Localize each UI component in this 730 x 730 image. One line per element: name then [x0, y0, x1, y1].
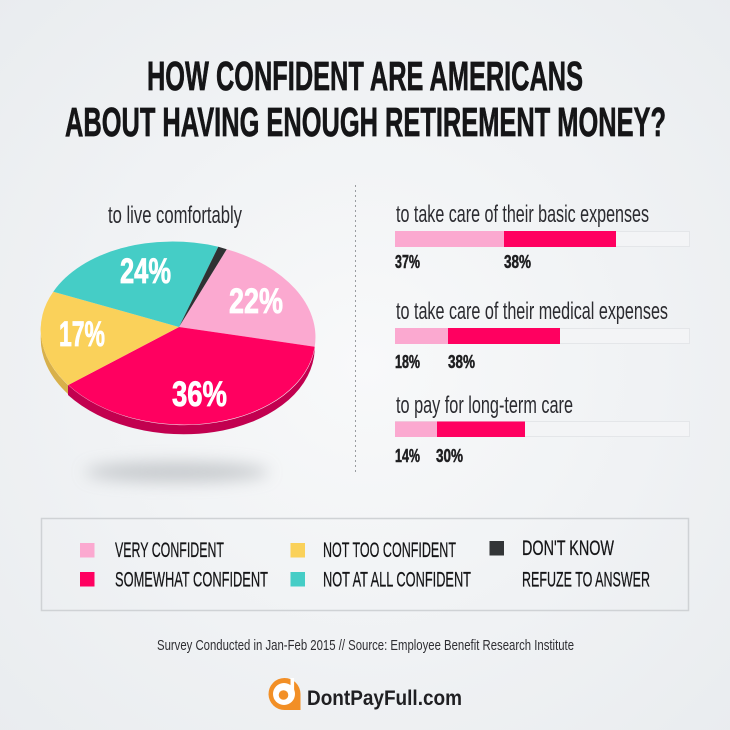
legend frame [42, 518, 688, 610]
pie label 36%: 36% [172, 375, 227, 414]
value 38%: 38% [448, 352, 475, 372]
swatch: not too confident [290, 543, 305, 558]
legend label: somewhat confident: SOMEWHAT CONFIDENT [115, 568, 268, 592]
pie side: not too confident [41, 325, 68, 394]
swatch: very confident [80, 543, 94, 558]
slice: somewhat confident 36% [68, 327, 315, 425]
pie label 22%: 22% [229, 282, 283, 321]
slice: very confident 22% [179, 249, 315, 347]
source note: Survey Conducted in Jan-Feb 2015 // Source: Employee Benefit Research Institute [157, 637, 574, 654]
somewhat confident segment [448, 328, 560, 344]
swatch: not at all confident [290, 572, 305, 586]
somewhat confident segment [437, 422, 525, 437]
pie label 24%: 24% [120, 252, 171, 291]
slice: not too confident 17% [41, 292, 179, 385]
value 38%: 38% [504, 252, 531, 272]
value 37%: 37% [395, 252, 420, 272]
bar chart: long-term care [395, 392, 690, 466]
slice: not at all confident 24% [53, 242, 218, 327]
slice: don't know [179, 247, 227, 327]
pie side: somewhat confident [68, 347, 315, 434]
pie shadow [85, 462, 269, 482]
very confident segment [395, 422, 437, 437]
value 14%: 14% [395, 446, 420, 466]
bar track [396, 328, 690, 344]
legend panel [42, 518, 688, 610]
pie label 17%: 17% [59, 315, 105, 354]
legend label: not at all confident: NOT AT ALL CONFIDENT [323, 568, 471, 592]
pie heading: to live comfortably [108, 202, 242, 229]
logo [268, 678, 462, 710]
bar chart: basic expenses [395, 201, 690, 272]
somewhat confident segment [504, 231, 616, 247]
swatch: somewhat confident [80, 572, 94, 586]
icon: logo mark [268, 678, 300, 710]
bar heading: to pay for long-term care [396, 392, 573, 419]
logo wordmark: DontPayFull.com [307, 687, 462, 710]
legend label: very confident: VERY CONFIDENT [115, 539, 224, 562]
value 30%: 30% [436, 446, 463, 466]
bar chart: medical expenses [395, 298, 690, 372]
very confident segment [395, 231, 504, 247]
legend label: not too confident: NOT TOO CONFIDENT [323, 539, 456, 562]
title [65, 53, 666, 145]
value 18%: 18% [395, 352, 420, 372]
bar track [396, 422, 690, 436]
very confident segment [395, 328, 448, 344]
legend label: don't know: DON'T KNOW [522, 537, 614, 560]
pie chart: to live comfortably [41, 202, 315, 482]
swatch: don't know [490, 541, 504, 556]
bar track [396, 232, 690, 246]
